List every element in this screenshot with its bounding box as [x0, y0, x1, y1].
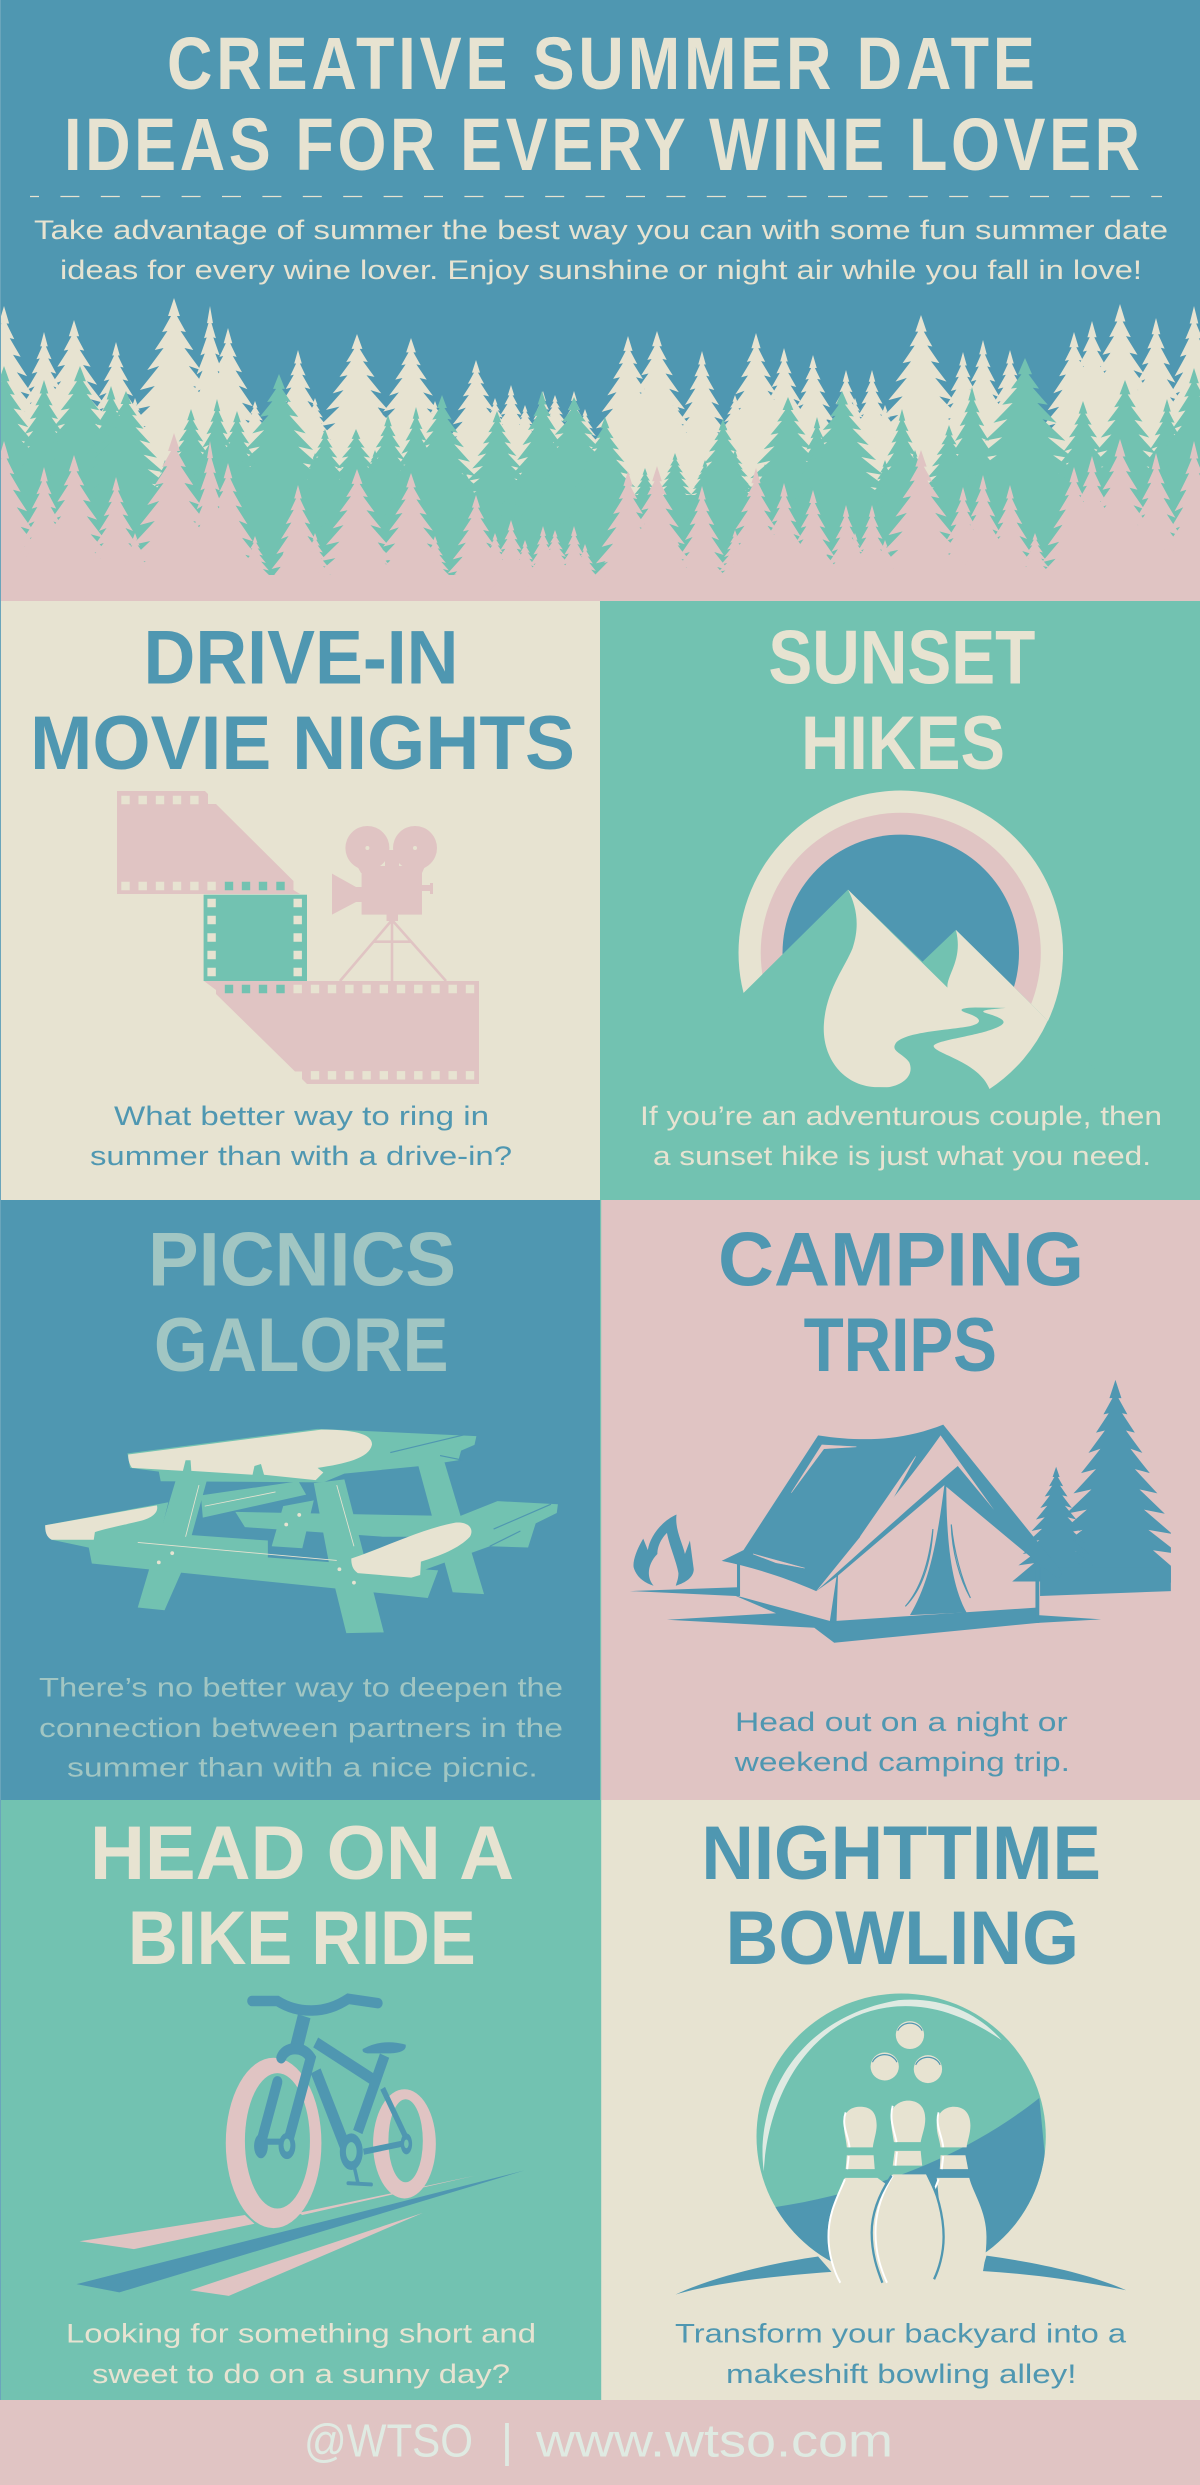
panel: picnics galore: [0, 1200, 600, 1800]
intro text: ideas for every wine lover. Enjoy sunshine or night air while you fall in love!: [60, 255, 1142, 285]
heading: NIGHTTIME: [701, 1811, 1101, 1896]
intro text: Take advantage of summer the best way you can with some fun summer date: [34, 215, 1168, 245]
footer text: @WTSO: [304, 2415, 473, 2467]
heading: [148, 1218, 456, 1388]
description: Transform your backyard into a: [675, 2319, 1127, 2349]
description: What better way to ring in: [114, 1101, 489, 1131]
description: summer than with a nice picnic.: [67, 1753, 538, 1783]
heading: DRIVE-IN: [144, 615, 458, 700]
icon: bowling ball and pins: [675, 1994, 1126, 2302]
icon: picnic table: [45, 1429, 558, 1633]
footer text: [304, 2415, 893, 2467]
description: There’s no better way to deepen the: [39, 1673, 563, 1703]
icon: film strip and movie camera: [117, 791, 479, 1084]
heading: HIKES: [801, 701, 1005, 786]
description: [675, 2319, 1127, 2389]
panel: drive-in movie nights: [0, 601, 600, 1200]
panel: sunset hikes: [600, 601, 1200, 1200]
footer text: www.wtso.com: [535, 2415, 893, 2467]
panel: footer: [0, 2400, 1200, 2485]
description: [733, 1707, 1070, 1777]
heading: [90, 1811, 514, 1981]
panel: nighttime bowling: [600, 1800, 1200, 2400]
description: Head out on a night or: [735, 1707, 1068, 1737]
description: If you’re an adventurous couple, then: [640, 1101, 1162, 1131]
description: [90, 1101, 512, 1171]
heading: [718, 1218, 1084, 1388]
heading: TRIPS: [804, 1303, 997, 1388]
icon: bicycle on road: [77, 1999, 524, 2296]
icon: mountains in circle: [715, 791, 1097, 1136]
description: sweet to do on a sunny day?: [92, 2359, 510, 2389]
description: summer than with a drive-in?: [90, 1141, 512, 1171]
illustration: forest: [0, 298, 1200, 638]
description: Looking for something short and: [66, 2319, 536, 2349]
title: CREATIVE SUMMER DATE: [167, 22, 1035, 105]
heading: MOVIE NIGHTS: [30, 701, 575, 786]
heading: PICNICS: [148, 1218, 456, 1303]
heading: GALORE: [154, 1303, 448, 1388]
heading: BOWLING: [726, 1896, 1079, 1981]
heading: [768, 615, 1035, 786]
description: [39, 1673, 563, 1783]
panel: header: [0, 0, 1200, 638]
panel: camping trips: [600, 1200, 1200, 1800]
title: IDEAS FOR EVERY WINE LOVER: [64, 103, 1140, 186]
intro text: [34, 215, 1168, 285]
description: makeshift bowling alley!: [726, 2359, 1076, 2389]
heading: [30, 615, 575, 786]
description: [640, 1101, 1162, 1171]
description: weekend camping trip.: [733, 1747, 1070, 1777]
description: a sunset hike is just what you need.: [653, 1141, 1151, 1171]
heading: BIKE RIDE: [128, 1896, 476, 1981]
footer text: |: [501, 2415, 513, 2467]
heading: [701, 1811, 1101, 1981]
heading: HEAD ON A: [90, 1811, 514, 1896]
title: [64, 22, 1140, 186]
description: [66, 2319, 536, 2389]
icon: tent, campfire and trees: [630, 1380, 1190, 1643]
heading: SUNSET: [768, 615, 1035, 700]
description: connection between partners in the: [39, 1713, 563, 1743]
panel: head on a bike ride: [0, 1800, 600, 2400]
heading: CAMPING: [718, 1218, 1084, 1303]
